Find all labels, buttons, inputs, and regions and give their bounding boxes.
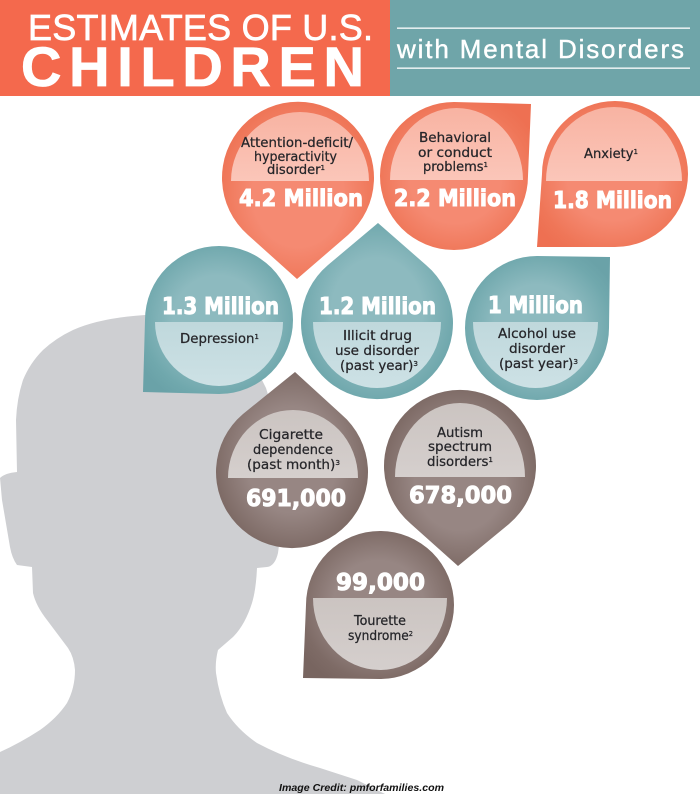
- value: 1.2 million: 1.2 Million: [319, 294, 436, 320]
- label: anxiety: Anxiety: [584, 147, 633, 162]
- label: alcohol use: [498, 327, 578, 372]
- value: 691,000: 691,000: [246, 486, 346, 512]
- title line: Children: CHILDREN: [21, 35, 364, 98]
- header banner: coral title panel: [0, 0, 390, 98]
- label: alcohol use: disorder: [509, 342, 566, 357]
- bubble: behavioral 2.2 million: [380, 102, 531, 250]
- label: behavioral: 1: [484, 161, 488, 169]
- label: cigarette: Cigarette: [259, 428, 323, 443]
- label: autism: disorders: [427, 455, 487, 470]
- label: illicit drug use: use disorder: [335, 344, 420, 359]
- label: autism: [427, 426, 493, 470]
- label: ADHD: hyperactivity: [254, 150, 337, 165]
- label: behavioral: [418, 131, 492, 175]
- image credit: Image Credit: pmforfamilies.com: [279, 782, 444, 794]
- label: Tourette: [348, 614, 413, 644]
- label: depression: Depression: [180, 332, 253, 347]
- subtitle: with Mental Disorders: [396, 34, 684, 64]
- label: illicit drug use: [335, 329, 420, 374]
- value: 4.2 million: 4.2 Million: [239, 186, 363, 212]
- label: illicit drug use: 3: [413, 360, 418, 368]
- bubble: alcohol use 1 million: [465, 256, 610, 400]
- label: alcohol use: Alcohol use: [498, 327, 576, 342]
- value: 678,000: 678,000: [409, 483, 512, 509]
- value: 1 million: 1 Million: [488, 293, 583, 319]
- label: alcohol use: (past year): [499, 357, 570, 372]
- header banner: teal subtitle panel: [390, 0, 700, 96]
- label: depression: 1: [254, 333, 259, 341]
- label: ADHD: [241, 136, 354, 178]
- label: Tourette: syndrome: [348, 629, 413, 644]
- label: autism: spectrum: [428, 440, 492, 455]
- bubble: cigarette dependence 691,000: [216, 372, 368, 548]
- label: behavioral: problems: [423, 160, 484, 175]
- bubble: anxiety 1.8 million: [537, 101, 688, 247]
- label: cigarette: (past month): [247, 458, 332, 473]
- bubble: Tourette 99,000: [303, 531, 454, 679]
- label: cigarette: dependence: [253, 443, 333, 458]
- value: 1.8 million: 1.8 Million: [553, 188, 672, 214]
- label: alcohol use: 3: [573, 358, 578, 366]
- label: illicit drug use: (past year): [340, 359, 411, 374]
- head silhouette: [0, 315, 385, 794]
- label: ADHD: Attention-deficit/: [241, 136, 354, 151]
- label: Tourette: Tourette: [353, 614, 406, 629]
- label: behavioral: Behavioral: [419, 131, 491, 146]
- label: cigarette: [247, 428, 340, 473]
- label: behavioral: or conduct: [418, 146, 492, 161]
- label: Tourette: 2: [409, 630, 413, 638]
- label: autism: 1: [488, 456, 493, 464]
- label: anxiety: 1: [634, 148, 638, 156]
- label: autism: Autism: [437, 426, 483, 441]
- label: cigarette: 3: [335, 459, 340, 467]
- label: ADHD: 1: [321, 164, 325, 172]
- value: 1.3 million: 1.3 Million: [162, 294, 279, 320]
- label: ADHD: disorder: [267, 163, 320, 178]
- label: illicit drug use: Illicit drug: [343, 329, 412, 344]
- value: 2.2 million: 2.2 Million: [394, 186, 516, 212]
- bubble: depression 1.3 million: [143, 246, 293, 394]
- bubble: illicit drug use 1.2 million: [301, 223, 453, 399]
- bubble: ADHD 4.2 million: [222, 102, 374, 279]
- title line: Estimates of U.S.: ESTIMATES OF U.S.: [28, 7, 373, 48]
- value: 99,000: 99,000: [336, 570, 425, 596]
- bubble: autism 678,000: [384, 390, 536, 566]
